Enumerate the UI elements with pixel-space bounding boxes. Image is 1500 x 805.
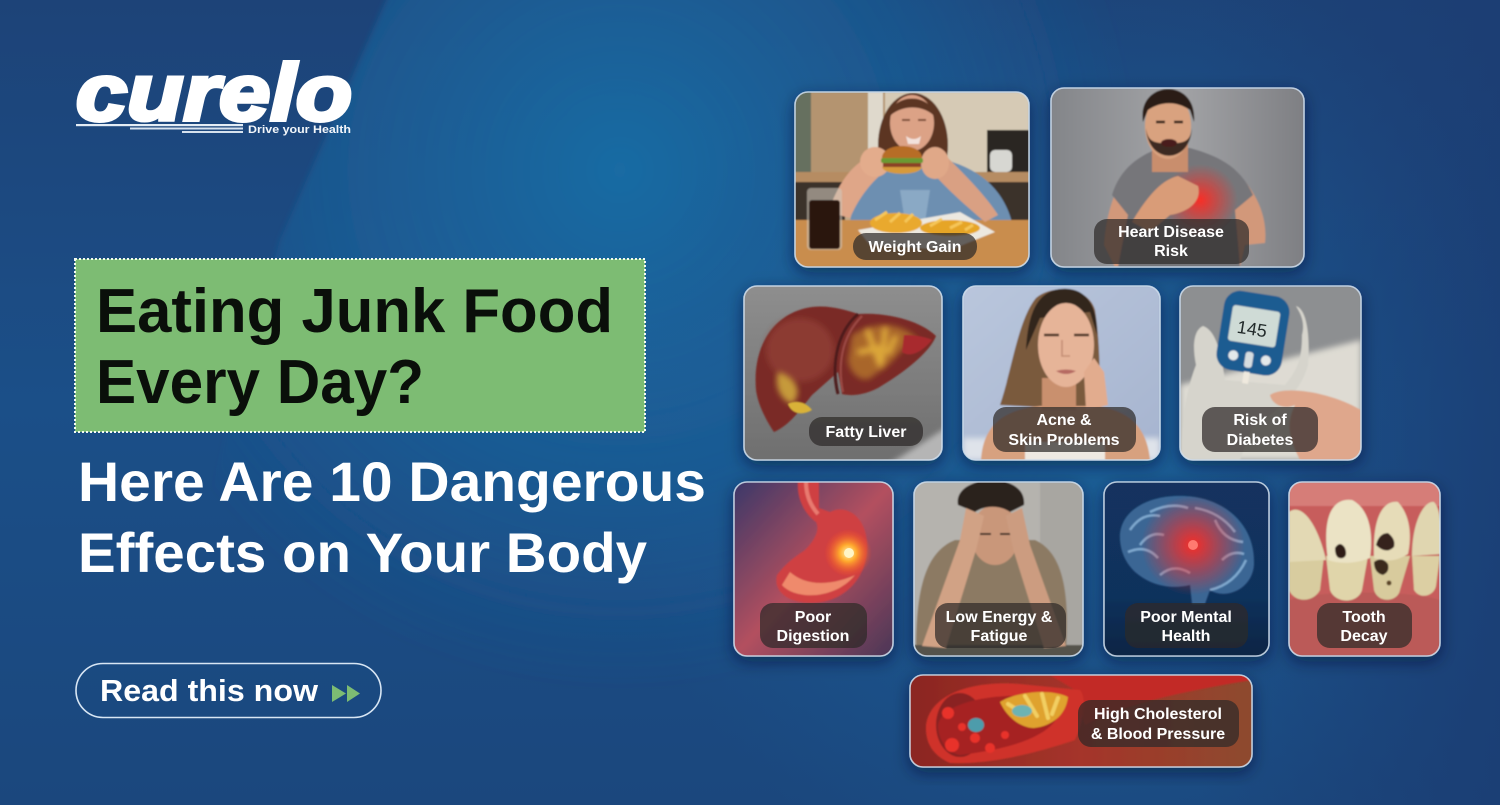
label: poor digestion (760, 603, 867, 648)
frame (1104, 482, 1269, 656)
label: poor digestion: Digestion (777, 628, 849, 645)
label: weight gain (853, 233, 977, 260)
label: high cholesterol and blood pressure: & Blood Pressure (1091, 726, 1225, 743)
frame (1289, 482, 1440, 656)
label: risk of diabetes: Diabetes (1227, 432, 1293, 449)
label: low energy and fatigue (935, 603, 1066, 648)
icon: double arrow (332, 685, 360, 702)
label: poor digestion: Poor (795, 609, 831, 626)
card: fatty liver (744, 286, 950, 470)
headline box: green: Eating Junk Food (96, 277, 613, 346)
photo: man clutching chest (1051, 88, 1304, 267)
subheading: Effects on Your Body (78, 521, 647, 584)
label: risk of diabetes (1202, 407, 1318, 452)
card: poor digestion (734, 480, 893, 656)
frame (914, 482, 1083, 656)
card: tooth decay (1289, 482, 1442, 656)
photo: woman touching cheek (963, 286, 1160, 460)
label: heart disease risk: Heart Disease (1118, 224, 1224, 241)
photo: stomach (734, 480, 893, 656)
card: poor mental health (1104, 482, 1269, 656)
label: low energy and fatigue: Low Energy & (946, 609, 1053, 626)
meter reading: 145 (1236, 317, 1268, 341)
logo: curelo: Drive your Health (248, 124, 351, 136)
label: heart disease risk: Risk (1154, 243, 1188, 260)
label: low energy and fatigue: Fatigue (971, 628, 1028, 645)
card: acne and skin problems (963, 286, 1160, 460)
frame (795, 92, 1029, 267)
subheading: Here Are 10 Dangerous (78, 450, 706, 513)
photo: liver (744, 286, 950, 470)
headline box: green: Every Day? (96, 348, 424, 417)
label: fatty liver (809, 417, 923, 446)
frame (963, 286, 1160, 460)
photo: woman eating burger (795, 92, 1029, 267)
label: tooth decay: Decay (1340, 628, 1388, 645)
photo: decayed teeth (1289, 482, 1442, 656)
frame (910, 675, 1252, 767)
label: acne and skin problems: Skin Problems (1008, 432, 1120, 449)
logo: curelo: curelo (76, 48, 352, 137)
button: read this now: Read this now (100, 673, 319, 708)
label: fatty liver: Fatty Liver (826, 424, 906, 441)
label: tooth decay: Tooth (1342, 609, 1386, 626)
label: risk of diabetes: Risk of (1233, 412, 1287, 429)
label: weight gain: Weight Gain (868, 239, 962, 256)
label: acne and skin problems: Acne & (1036, 412, 1092, 429)
frame (734, 482, 893, 656)
card: risk of diabetes (1180, 286, 1361, 460)
photo: brain (1104, 482, 1269, 656)
label: tooth decay (1317, 603, 1412, 648)
photo: clogged artery (910, 675, 1252, 767)
label: high cholesterol and blood pressure: High Cholesterol (1094, 706, 1222, 723)
label: acne and skin problems (993, 407, 1136, 452)
card: low energy and fatigue (914, 480, 1083, 656)
label: high cholesterol and blood pressure (1078, 700, 1239, 747)
label: poor mental health: Health (1162, 628, 1210, 645)
frame (744, 286, 942, 460)
photo: glucose meter (1180, 286, 1361, 460)
photo: tired man (914, 480, 1083, 656)
card: weight gain (795, 92, 1029, 267)
headline box: green (75, 259, 645, 432)
subheading (78, 450, 706, 584)
card: heart disease risk (1051, 88, 1304, 267)
label: poor mental health: Poor Mental (1140, 609, 1232, 626)
label: heart disease risk (1094, 219, 1249, 264)
frame (1180, 286, 1361, 460)
frame (1051, 88, 1304, 267)
card: high cholesterol and blood pressure (910, 675, 1252, 767)
label: poor mental health (1125, 603, 1248, 648)
button: read this now (76, 664, 381, 718)
